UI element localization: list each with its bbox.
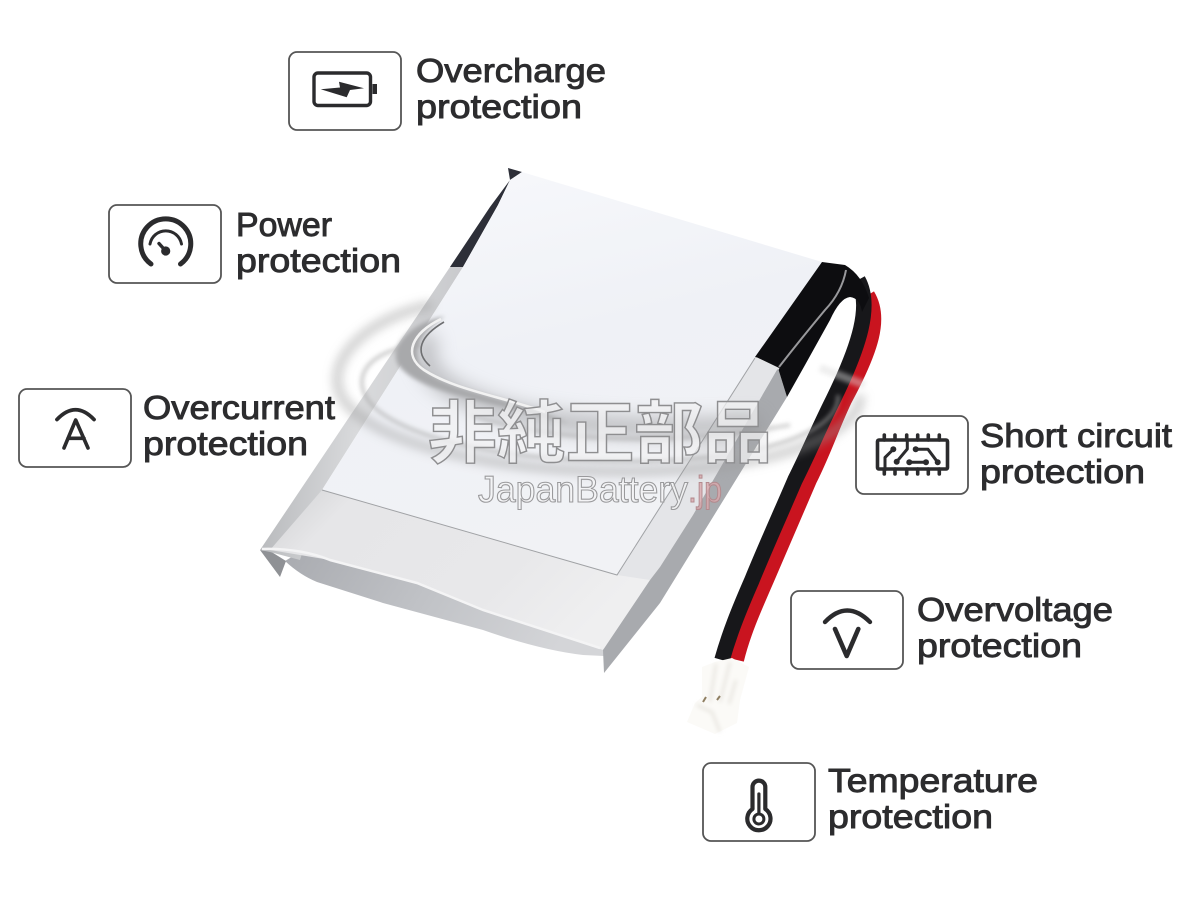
- label: protection: [980, 453, 1145, 490]
- icon: thermometer: [747, 781, 770, 830]
- watermark: site name: JapanBattery: [478, 469, 688, 510]
- red wire: [737, 295, 874, 660]
- fold highlight: [262, 549, 600, 648]
- dark top edge: [450, 168, 522, 267]
- right gray strip: [603, 368, 787, 673]
- panel: power protection: [109, 205, 401, 283]
- connector: [687, 658, 749, 734]
- label: protection: [416, 88, 582, 125]
- label: [416, 52, 606, 125]
- left silver edge: [260, 267, 463, 560]
- watermark: [428, 396, 772, 510]
- label: Short circuit: [980, 417, 1172, 454]
- panel: overcharge protection: [289, 52, 606, 130]
- lower silver band: [270, 490, 660, 650]
- watermark: Japanese text: 非純正部品: [428, 396, 772, 472]
- label: Overcurrent: [143, 389, 335, 426]
- label outline: [322, 358, 755, 575]
- panel: overvoltage protection: [791, 591, 1113, 669]
- icon: voltage: [825, 610, 870, 656]
- label: [828, 762, 1038, 835]
- icon: ampere: [57, 410, 94, 448]
- label: [143, 389, 335, 462]
- label: Overcharge: [416, 52, 606, 89]
- watermark: domain suffix: .jp: [688, 469, 722, 510]
- left corner flap: [260, 550, 286, 577]
- label: [917, 591, 1113, 664]
- label: protection: [828, 798, 993, 835]
- black heat-shrink sleeve: [755, 262, 869, 397]
- battery illustration: [260, 168, 822, 673]
- battery underside: [285, 552, 604, 656]
- icon: circuit chip: [878, 435, 948, 474]
- panel: temperature protection: [703, 762, 1038, 841]
- right light strip: [617, 358, 778, 580]
- icon: battery with bolt: [314, 73, 377, 106]
- label: protection: [917, 627, 1082, 664]
- icon: gauge: [141, 219, 191, 264]
- swirl effect: [337, 305, 865, 471]
- label: [236, 206, 401, 279]
- white label panel: [322, 172, 822, 575]
- panel: short circuit protection: [856, 416, 1172, 494]
- label: protection: [236, 242, 401, 279]
- label: [980, 417, 1172, 490]
- label: Overvoltage: [917, 591, 1113, 628]
- label: Temperature: [828, 762, 1038, 799]
- panel: overcurrent protection: [19, 389, 335, 467]
- black wire: [722, 280, 864, 660]
- label: Power: [236, 206, 332, 243]
- label: protection: [143, 425, 308, 462]
